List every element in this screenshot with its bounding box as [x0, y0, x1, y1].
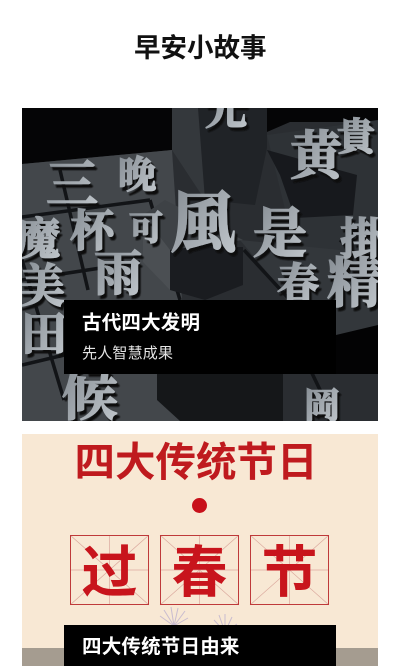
caption: festival origins — [64, 625, 336, 666]
type characters: 是 — [253, 191, 307, 268]
panel: movable type photo — [22, 108, 378, 421]
block: top cube — [172, 108, 267, 205]
title: 早安小故事 — [134, 33, 266, 63]
type characters: 田 — [22, 298, 67, 364]
caption heading: 四大传统节日由来 — [82, 636, 240, 658]
type characters: 杯 — [70, 195, 118, 259]
type characters: 可 — [129, 201, 163, 250]
type characters: 雨 — [94, 235, 142, 304]
caption: four great inventions — [64, 300, 336, 374]
type characters: 風 — [170, 170, 236, 265]
bottom band — [22, 648, 378, 666]
caption subtitle: 先人智慧成果 — [82, 345, 173, 362]
type characters — [16, 77, 388, 432]
type characters: 三 — [46, 143, 98, 218]
type characters: 晚 — [118, 144, 156, 199]
icon: fireworks — [160, 607, 238, 625]
red dot — [192, 498, 207, 513]
block: centre cube — [143, 200, 243, 300]
block: bottom cube — [157, 374, 283, 421]
grid cell: 过 — [70, 528, 149, 609]
character grids — [70, 535, 330, 606]
caption heading: 古代四大发明 — [82, 312, 200, 334]
type characters: 春 — [277, 251, 319, 311]
block: right cube — [267, 150, 357, 218]
grid cell: 春 — [160, 528, 239, 609]
festival heading: 四大传统节日 — [74, 439, 318, 485]
panel: traditional festivals — [22, 434, 378, 666]
grid cell: 节 — [250, 528, 329, 609]
type characters: 黄 — [290, 114, 348, 189]
